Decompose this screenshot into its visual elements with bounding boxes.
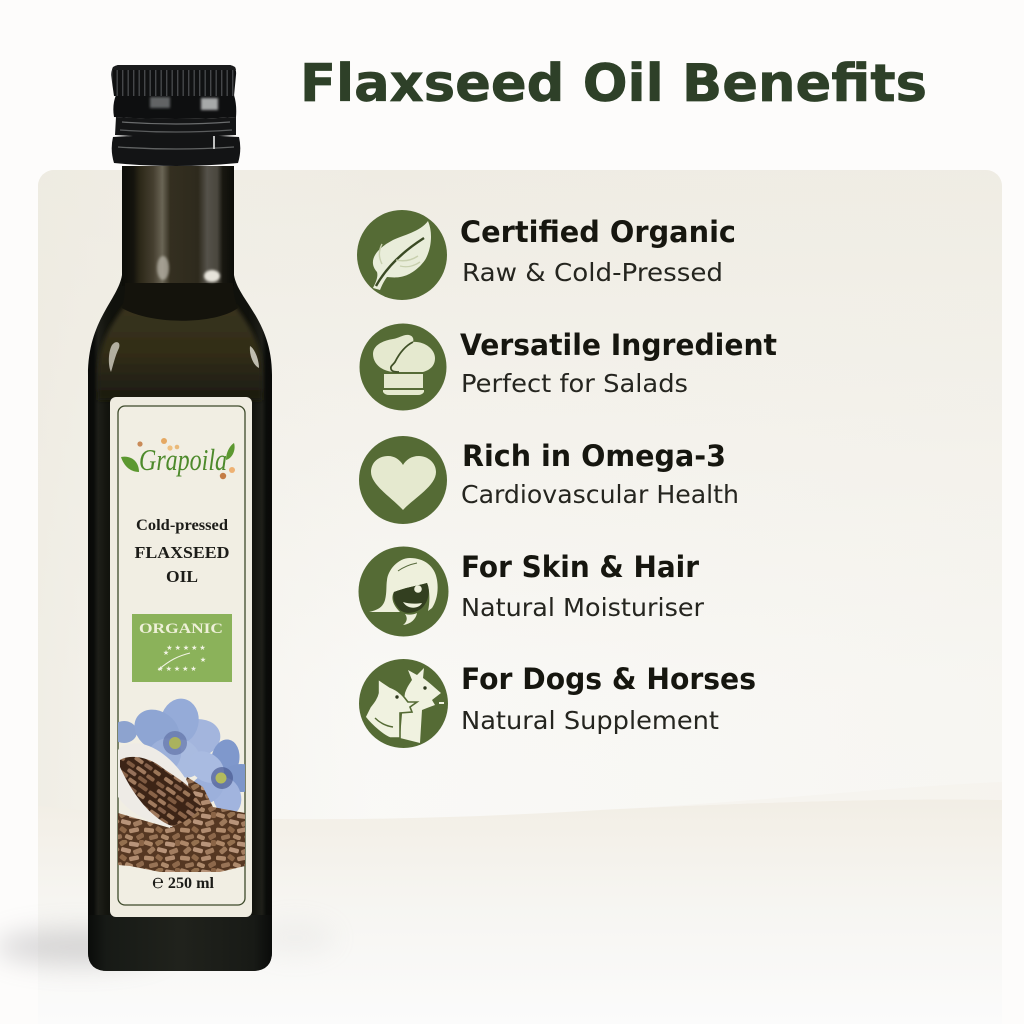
- benefit 1: [357, 210, 736, 300]
- organic badge: [132, 614, 232, 682]
- icon: leaf: [357, 210, 447, 300]
- organic badge: ★: [200, 656, 206, 664]
- cap: [111, 65, 236, 96]
- icon: woman face: [358, 546, 448, 636]
- benefit text: Rich in Omega-3: [462, 439, 726, 473]
- benefit 2: [360, 324, 777, 410]
- benefit 5: Natural Supplement: [461, 706, 719, 735]
- screw collar: [112, 95, 240, 166]
- organic badge: ORGANIC: [139, 621, 223, 637]
- organic badge: ★★★★★: [157, 665, 199, 673]
- icon: heart: [359, 436, 447, 524]
- bottle shoulder oil: [98, 306, 262, 400]
- icon: chef hat: [360, 324, 446, 410]
- benefit 5: [359, 659, 756, 748]
- icon: dog and horse: [359, 659, 448, 748]
- benefit 3: Cardiovascular Health: [461, 480, 739, 509]
- background panel: [38, 170, 1002, 1024]
- organic badge: ★: [163, 649, 169, 657]
- benefit 1: Raw & Cold-Pressed: [462, 258, 723, 287]
- volume: ℮ 250 ml: [152, 872, 215, 893]
- bottle base: [88, 915, 272, 971]
- flowers: [118, 698, 245, 812]
- benefit 4: [358, 546, 705, 636]
- label: FLAXSEED: [134, 543, 230, 562]
- seed pile: [118, 777, 245, 872]
- label text: Cold-pressed: [136, 517, 228, 534]
- title: Flaxseed Oil Benefits: [300, 54, 927, 114]
- bottle shadow: [0, 922, 335, 965]
- neck highlights: [157, 256, 220, 282]
- benefit text: Certified Organic: [460, 215, 736, 249]
- brand logo: Grapoila: [139, 442, 227, 477]
- bottle body: [88, 166, 272, 971]
- neck dark oil band: [122, 283, 238, 321]
- bottle neck glass: [122, 166, 234, 286]
- shoulder highlights: [109, 342, 259, 372]
- benefit text: For Dogs & Horses: [461, 662, 756, 696]
- benefit 3: [359, 436, 739, 524]
- flax illustration: [118, 698, 245, 872]
- bowl seeds: [120, 757, 202, 826]
- brand logo: [121, 438, 235, 479]
- benefit text: Versatile Ingredient: [460, 328, 777, 362]
- organic badge: ★★★★★: [166, 644, 208, 652]
- bowl: [118, 743, 190, 827]
- label: [110, 397, 261, 917]
- benefit 4: Natural Moisturiser: [461, 593, 705, 622]
- benefit 2: Perfect for Salads: [461, 369, 688, 398]
- bottle: [88, 65, 272, 971]
- label: OIL: [166, 567, 198, 586]
- benefit text: For Skin & Hair: [461, 550, 700, 584]
